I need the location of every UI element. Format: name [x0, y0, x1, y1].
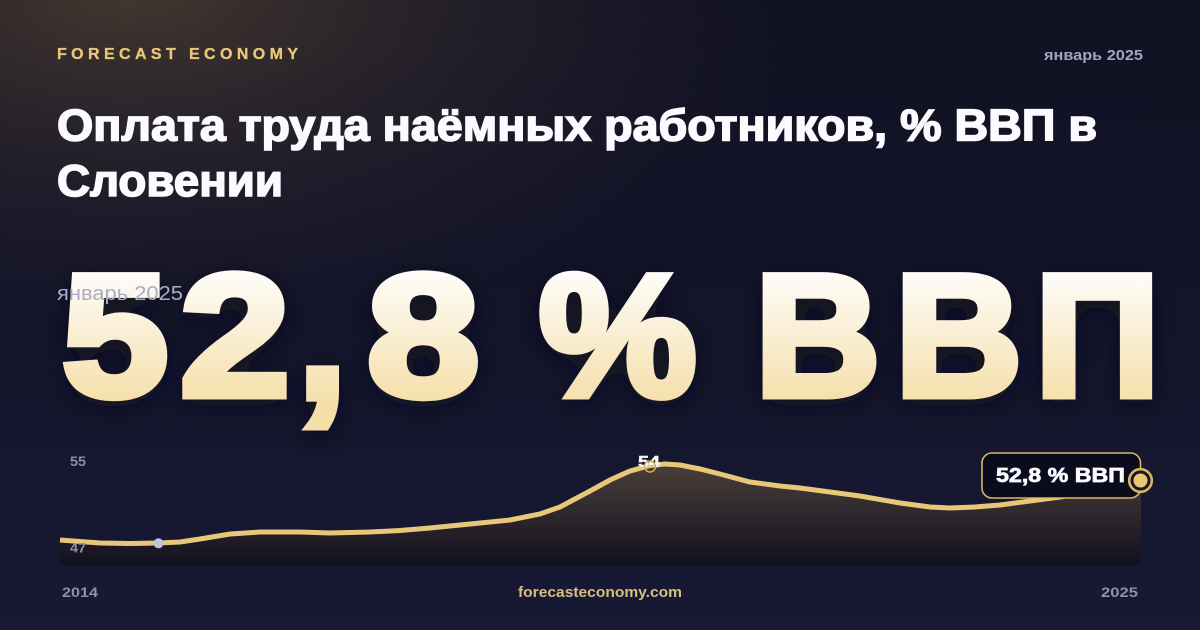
end marker [1129, 469, 1152, 492]
area fill [60, 464, 1141, 565]
title: Оплата труда наёмных работников, % ВВП в [57, 102, 1097, 150]
axis label 47: 47 [70, 540, 86, 556]
peak marker [644, 461, 656, 472]
minimum marker [154, 538, 164, 548]
big value: 52,8 % ВВП: % [539, 239, 696, 433]
big value: 52,8 % ВВП: В [895, 240, 1022, 433]
big value: 52,8 % ВВП: П [1035, 238, 1160, 432]
source url: forecasteconomy.com [518, 585, 682, 601]
title: Словении [57, 157, 283, 206]
axis start year: 2014 [62, 584, 98, 600]
callout: latest value: 52,8 % ВВП [996, 465, 1125, 487]
area chart [60, 454, 1141, 565]
date top right: январь 2025 [1044, 47, 1143, 64]
line [60, 464, 1141, 544]
big value: 52,8 % ВВП: 8 [367, 238, 480, 432]
brand label: FORECAST ECONOMY [57, 46, 298, 63]
axis label 55: 55 [70, 453, 86, 469]
callout: latest value [982, 453, 1140, 498]
peak label: 54 [638, 454, 660, 471]
title [57, 102, 1097, 206]
big value: 52,8 % ВВП [62, 230, 1160, 438]
big value: 52,8 % ВВП: В [755, 238, 880, 432]
axis end year: 2025 [1101, 584, 1138, 600]
big value: 52,8 % ВВП: , [298, 230, 347, 438]
date overlapping value: январь 2025 [57, 283, 183, 305]
big value: 52,8 % ВВП: 5 [62, 239, 168, 433]
big value: 52,8 % ВВП: 2 [180, 240, 290, 433]
